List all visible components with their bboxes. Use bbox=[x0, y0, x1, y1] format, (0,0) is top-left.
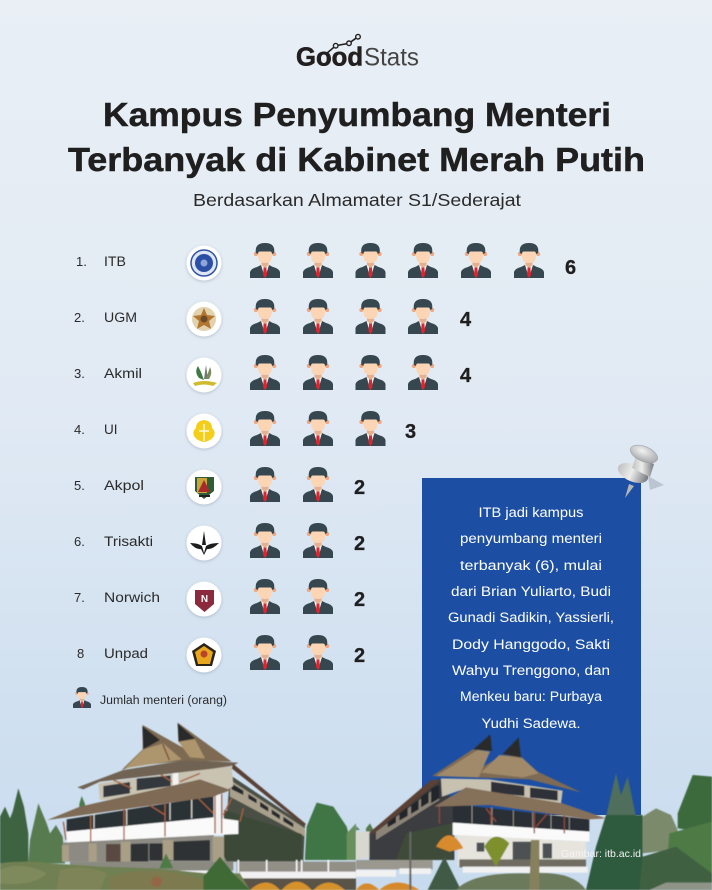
row 3: Akmil, 4 ministers: 4 bbox=[460, 365, 472, 387]
row 1: ITB, 6 ministers bbox=[76, 243, 576, 280]
row 8: Unpad, 2 ministers: Unpad bbox=[104, 646, 148, 661]
row 1: ITB, 6 ministers: 6 bbox=[565, 257, 576, 279]
row 5: Akpol, 2 ministers bbox=[74, 467, 365, 504]
left wing wall bbox=[369, 778, 454, 860]
logo: GoodStats: Good bbox=[296, 42, 363, 72]
upper band bbox=[98, 766, 233, 800]
logo: Unpad bbox=[186, 638, 222, 672]
bridge and terrace bbox=[356, 860, 433, 869]
row 3: Akmil, 4 ministers: 3. bbox=[74, 366, 85, 381]
row 2: UGM, 4 ministers bbox=[74, 299, 472, 336]
row 2: UGM, 4 ministers: UGM bbox=[104, 310, 137, 325]
row 8: Unpad, 2 ministers bbox=[77, 635, 365, 672]
row 4: UI, 3 ministers: 3 bbox=[405, 421, 416, 443]
callout text: penyumbang menteri bbox=[460, 531, 602, 546]
callout text: terbanyak (6), mulai bbox=[460, 558, 602, 573]
callout text: dari Brian Yuliarto, Budi bbox=[451, 584, 611, 599]
upper band bbox=[441, 778, 563, 804]
roofs bbox=[434, 787, 606, 819]
logo: Akpol bbox=[186, 470, 222, 504]
trees bbox=[606, 773, 636, 817]
callout text: Yudhi Sadewa. bbox=[482, 716, 580, 731]
row 6: Trisakti, 2 ministers: Trisakti bbox=[104, 534, 153, 549]
row 5: Akpol, 2 ministers: Akpol bbox=[104, 478, 144, 493]
legend bbox=[73, 687, 227, 708]
columns bbox=[62, 837, 224, 863]
row 6: Trisakti, 2 ministers: 6. bbox=[74, 534, 85, 549]
row 4: UI, 3 ministers bbox=[74, 411, 416, 448]
logo: Norwich bbox=[186, 582, 222, 616]
ground floor bbox=[63, 835, 227, 862]
row 1: ITB, 6 ministers: 1. bbox=[76, 254, 87, 269]
logo: Norwich: N bbox=[201, 594, 208, 605]
row 7: Norwich, 2 ministers: Norwich bbox=[104, 590, 160, 605]
callout text bbox=[448, 505, 614, 731]
foreground plants bbox=[356, 882, 419, 890]
row 6: Trisakti, 2 ministers: 2 bbox=[354, 533, 365, 555]
row 7: Norwich, 2 ministers bbox=[74, 579, 365, 616]
title: Kampus Penyumbang Menteri bbox=[103, 96, 611, 133]
row 5: Akpol, 2 ministers: 2 bbox=[354, 477, 365, 499]
row 2: UGM, 4 ministers: 4 bbox=[460, 309, 472, 331]
logo: UI bbox=[186, 414, 222, 448]
row 7: Norwich, 2 ministers: 7. bbox=[74, 590, 85, 605]
row 7: Norwich, 2 ministers: 2 bbox=[354, 589, 365, 611]
row 8: Unpad, 2 ministers: 8 bbox=[77, 646, 84, 661]
row 1: ITB, 6 ministers: ITB bbox=[104, 254, 126, 269]
callout text: ITB jadi kampus bbox=[478, 505, 584, 520]
callout text: Gunadi Sadikin, Yassierli, bbox=[448, 610, 614, 625]
logo: GoodStats: Stats bbox=[364, 44, 419, 72]
ground floor bbox=[458, 835, 586, 867]
callout text: Wahyu Trenggono, dan bbox=[452, 663, 610, 678]
bridge bbox=[70, 862, 233, 871]
lower window band bbox=[453, 804, 589, 832]
photo: left ITB building bbox=[0, 723, 356, 890]
white band bbox=[453, 823, 589, 842]
trees bbox=[0, 788, 28, 863]
row 4: UI, 3 ministers: UI bbox=[104, 422, 118, 437]
title bbox=[68, 96, 645, 178]
title: Terbanyak di Kabinet Merah Putih bbox=[68, 141, 645, 178]
callout text: Dody Hanggodo, Sakti bbox=[452, 637, 610, 652]
logo: Akmil bbox=[186, 358, 222, 392]
subtitle: Berdasarkan Almamater S1/Sederajat bbox=[193, 190, 521, 210]
logo: Trisakti bbox=[186, 526, 222, 560]
photo: right ITB building bbox=[356, 734, 712, 890]
roofs bbox=[47, 779, 231, 820]
callout panel bbox=[422, 478, 641, 815]
row 3: Akmil, 4 ministers: Akmil bbox=[104, 366, 142, 381]
logo: ITB bbox=[186, 246, 222, 280]
logo: UGM bbox=[186, 302, 222, 336]
side wing wall bbox=[223, 775, 305, 862]
lower window band bbox=[67, 796, 213, 832]
callout text: Menkeu baru: Purbaya bbox=[460, 689, 602, 704]
row 5: Akpol, 2 ministers: 5. bbox=[74, 478, 85, 493]
legend: Jumlah menteri (orang) bbox=[100, 695, 227, 707]
row 6: Trisakti, 2 ministers bbox=[74, 523, 365, 560]
row 2: UGM, 4 ministers: 2. bbox=[74, 310, 85, 325]
row 8: Unpad, 2 ministers: 2 bbox=[354, 645, 365, 667]
icon: push pin bbox=[615, 441, 664, 498]
image credit: Gambar: itb.ac.id bbox=[561, 848, 641, 860]
logo: GoodStats bbox=[296, 34, 419, 72]
row 4: UI, 3 ministers: 4. bbox=[74, 422, 85, 437]
row 3: Akmil, 4 ministers bbox=[74, 355, 472, 392]
bushes bbox=[0, 862, 250, 890]
